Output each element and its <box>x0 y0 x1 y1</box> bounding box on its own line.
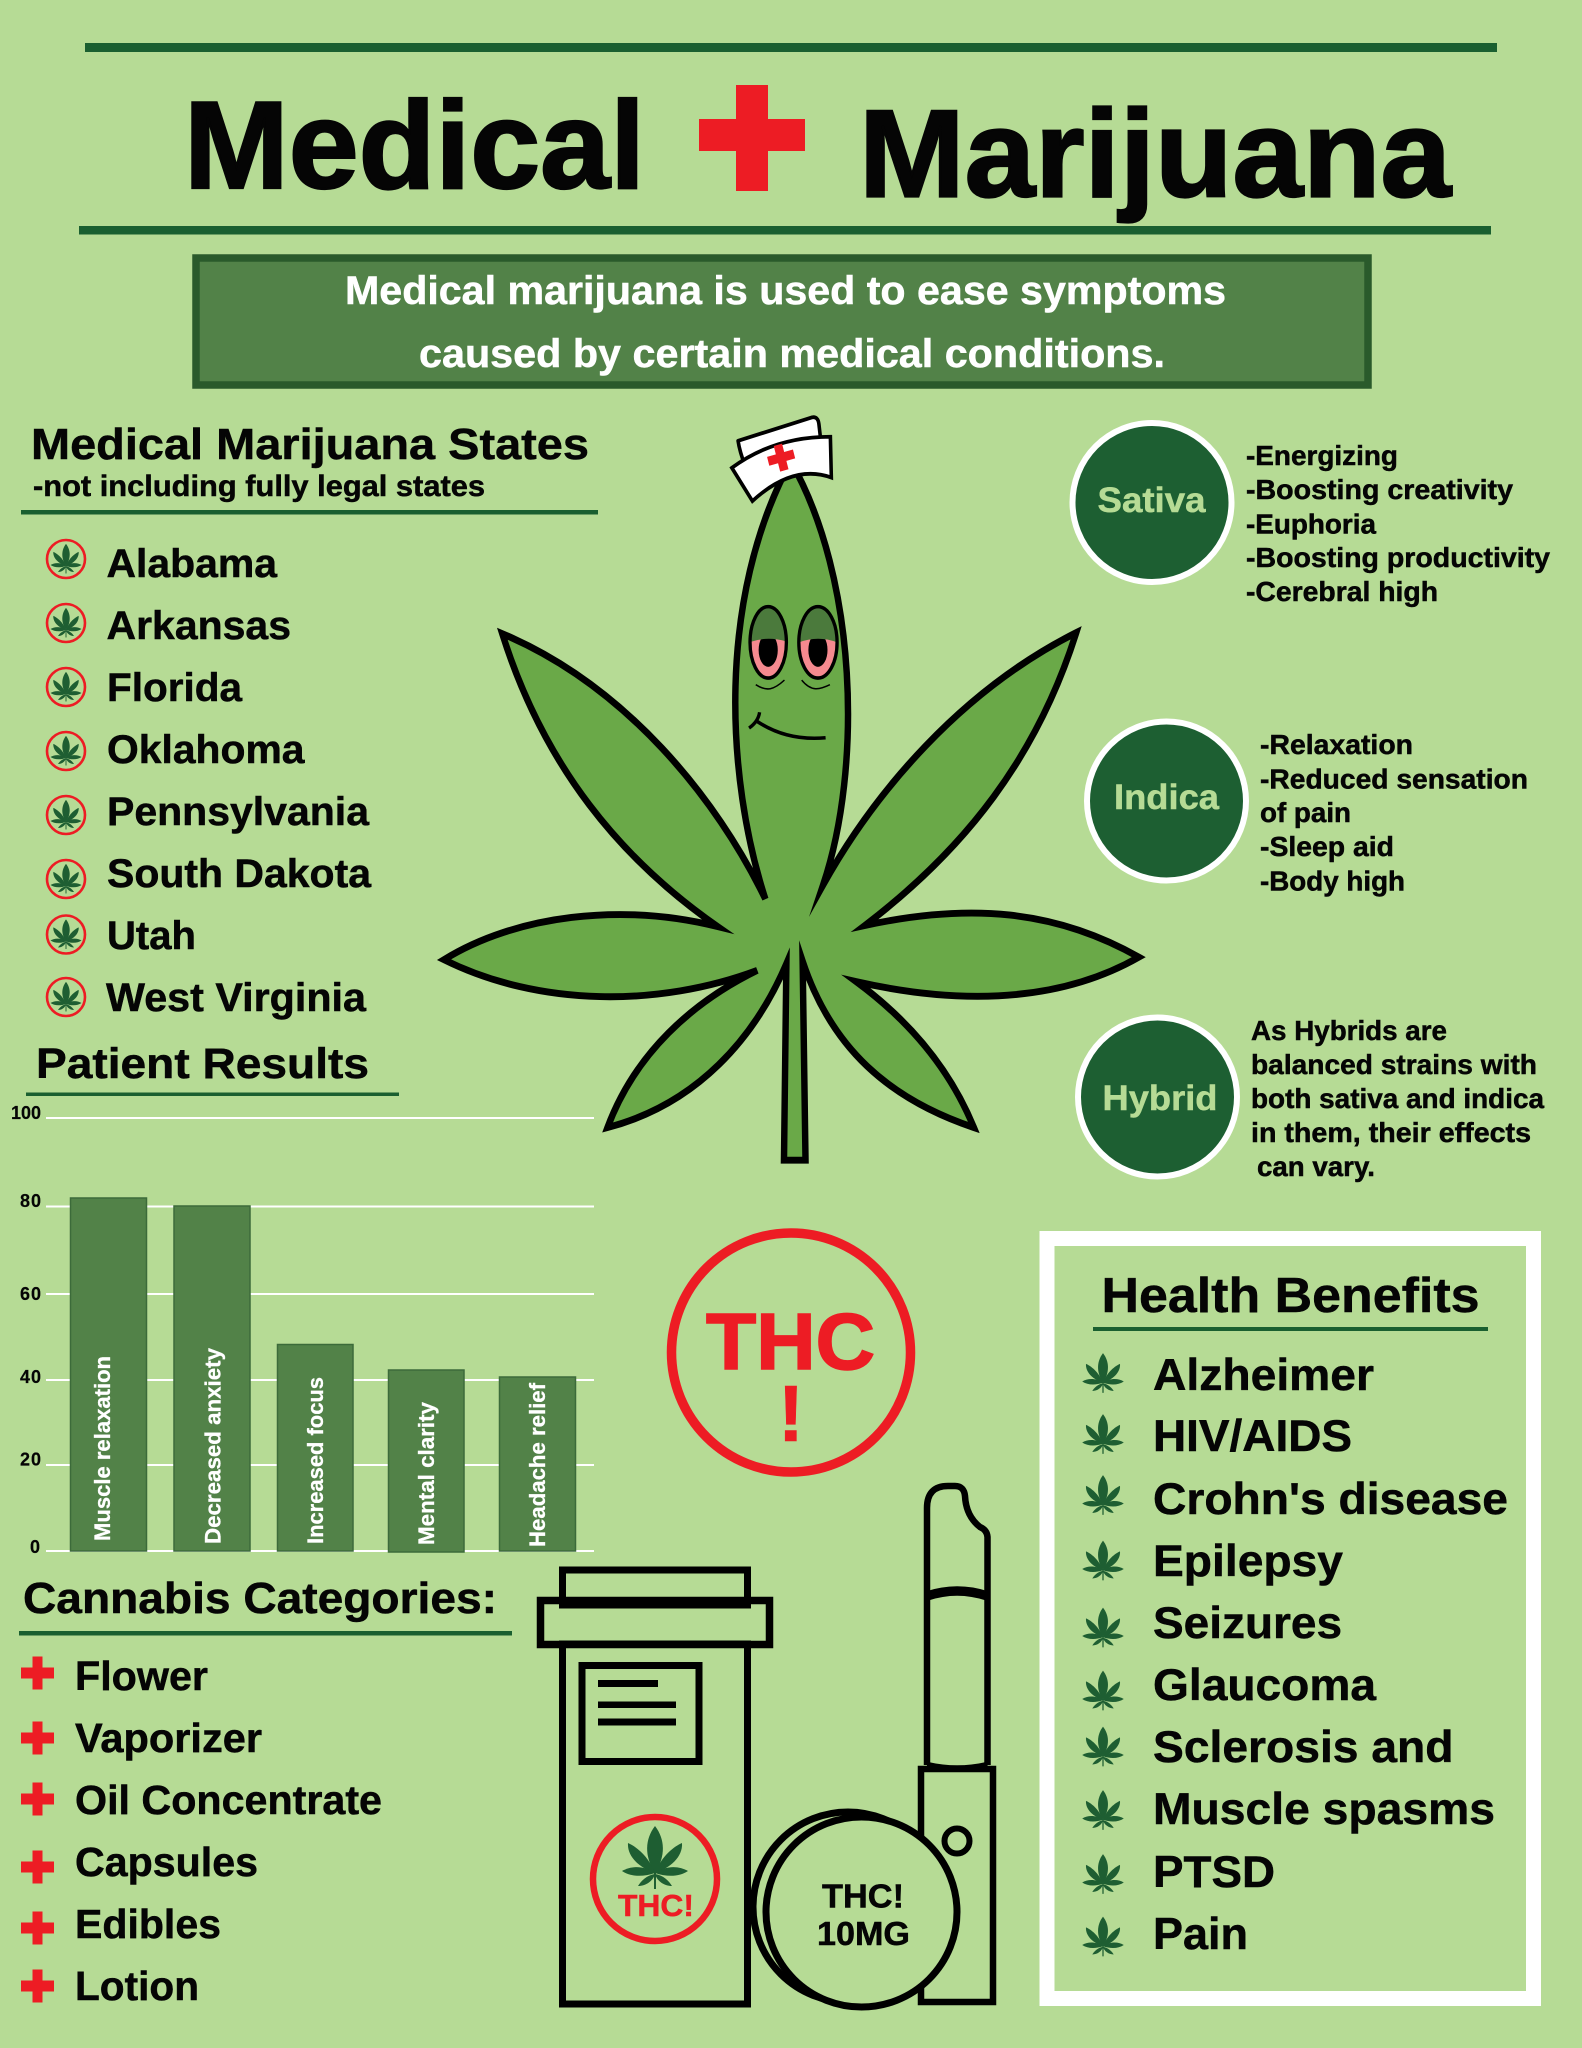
THC warning badge <box>672 1233 910 1472</box>
sativa effects: -Boosting creativity <box>1246 474 1514 505</box>
indica effects: of pain <box>1260 797 1351 828</box>
panel: cannabis categories <box>19 1574 512 2009</box>
indica effects: -Reduced sensation <box>1260 764 1528 795</box>
state list: Utah <box>107 914 196 958</box>
benefits list: Pain <box>1153 1910 1248 1959</box>
indica effects <box>1260 729 1528 897</box>
intro banner: Medical marijuana is used to ease symptoms <box>345 269 1226 313</box>
state list <box>106 542 372 1020</box>
bars <box>70 1198 576 1552</box>
cross bullets <box>21 1656 54 2002</box>
strain: hybrid <box>1078 1015 1545 1182</box>
title: Medical: Medical <box>184 77 645 215</box>
hybrid description: balanced strains with <box>1251 1049 1537 1080</box>
bar labels: Headache relief <box>525 1383 550 1547</box>
sativa effects: -Energizing <box>1246 440 1398 471</box>
benefits list: Sclerosis and <box>1153 1723 1454 1772</box>
bar labels: Decreased anxiety <box>200 1348 226 1544</box>
panel: patient results chart <box>11 1040 594 1557</box>
under-eye lines <box>756 680 830 689</box>
category list: Flower <box>75 1653 208 1699</box>
hybrid description <box>1251 1015 1545 1182</box>
hybrid description: both sativa and indica <box>1251 1083 1545 1114</box>
axis labels: 80 <box>20 1191 41 1211</box>
benefits list: HIV/AIDS <box>1153 1412 1352 1461</box>
state icons <box>47 540 85 1016</box>
pill bottle <box>540 1570 770 2004</box>
heading: patient results: Patient Results <box>36 1040 369 1088</box>
sativa effects: -Cerebral high <box>1246 576 1438 607</box>
strain: sativa: Sativa <box>1098 480 1206 520</box>
benefits list: Alzheimer <box>1153 1351 1374 1400</box>
state list: Oklahoma <box>107 728 306 772</box>
indica effects: -Body high <box>1260 866 1405 897</box>
hybrid description: As Hybrids are <box>1251 1015 1447 1046</box>
bar labels <box>90 1348 550 1547</box>
category list: Vaporizer <box>75 1715 262 1761</box>
nurse hat <box>732 417 831 501</box>
state list: Florida <box>107 666 243 710</box>
edible tin: THC! <box>822 1878 904 1914</box>
edible tin: 10MG <box>817 1915 910 1952</box>
hybrid description: can vary. <box>1257 1151 1375 1182</box>
sativa effects <box>1246 440 1551 607</box>
THC seal: THC! <box>618 1888 694 1923</box>
benefits list: Crohn's disease <box>1153 1475 1508 1524</box>
THC warning badge: ! <box>778 1369 804 1458</box>
benefits list: Epilepsy <box>1153 1537 1343 1586</box>
THC seal <box>593 1817 717 1941</box>
cannabis leaf mascot <box>444 417 1139 1160</box>
heading: categories: Cannabis Categories: <box>23 1574 497 1623</box>
vape pen <box>921 1486 993 2002</box>
bottle label <box>582 1666 699 1762</box>
icon: red cross <box>699 85 805 191</box>
axis labels: 100 <box>11 1103 41 1123</box>
strain: sativa <box>1072 423 1551 607</box>
axis labels: 60 <box>20 1284 41 1304</box>
indica effects: -Relaxation <box>1260 729 1413 760</box>
category list: Capsules <box>75 1839 258 1885</box>
edible tin <box>753 1812 957 2007</box>
benefits list: Seizures <box>1153 1599 1342 1648</box>
bar labels: Increased focus <box>303 1377 328 1544</box>
state list: Pennsylvania <box>107 790 370 834</box>
state list: Alabama <box>106 542 278 586</box>
strain: indica: Indica <box>1114 777 1219 817</box>
title: Marijuana: Marijuana <box>859 86 1452 224</box>
strain: indica <box>1087 722 1528 897</box>
axis labels: 20 <box>20 1450 41 1470</box>
category list <box>75 1653 382 2009</box>
sativa effects: -Euphoria <box>1246 508 1377 540</box>
eye: right <box>795 604 841 678</box>
axis labels: 40 <box>20 1367 41 1387</box>
benefits list <box>1153 1351 1508 1959</box>
heading: health benefits: Health Benefits <box>1102 1269 1480 1323</box>
mouth <box>749 712 826 738</box>
panel: health benefits <box>1047 1238 1534 1998</box>
state list: West Virginia <box>106 976 367 1020</box>
bar labels: Muscle relaxation <box>90 1356 115 1541</box>
axis labels: 0 <box>30 1537 40 1557</box>
benefits list: Glaucoma <box>1153 1661 1377 1710</box>
benefits list: Muscle spasms <box>1153 1785 1495 1834</box>
state list: South Dakota <box>107 852 372 896</box>
hybrid description: in them, their effects <box>1251 1117 1531 1148</box>
strain: hybrid: Hybrid <box>1102 1078 1218 1118</box>
state list: Arkansas <box>106 604 291 648</box>
leaf bullets <box>1082 1353 1124 1956</box>
axis labels <box>11 1103 41 1557</box>
sativa effects: -Boosting productivity <box>1246 542 1551 573</box>
subheading: -not including fully legal states <box>33 470 485 503</box>
benefits list: PTSD <box>1153 1848 1275 1897</box>
bar labels: Mental clarity <box>414 1402 439 1545</box>
intro banner: caused by certain medical conditions. <box>419 332 1165 376</box>
indica effects: -Sleep aid <box>1260 831 1394 862</box>
eye: left <box>748 604 788 680</box>
THC warning badge: THC <box>706 1297 875 1386</box>
category list: Lotion <box>75 1963 199 2009</box>
intro banner <box>196 258 1368 385</box>
leaf body <box>444 461 1139 1160</box>
category list: Edibles <box>75 1901 221 1947</box>
category list: Oil Concentrate <box>75 1777 382 1823</box>
heading: states: Medical Marijuana States <box>31 420 589 469</box>
header <box>79 43 1497 234</box>
panel: medical marijuana states <box>21 420 598 1020</box>
hat cross <box>765 441 797 474</box>
